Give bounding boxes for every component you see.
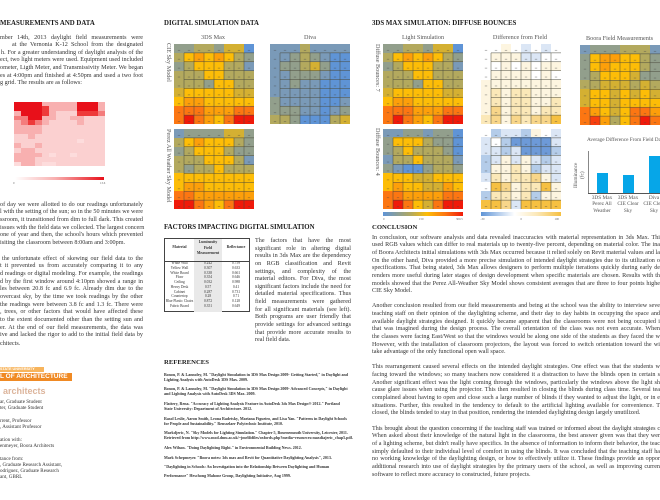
legend: light simulation colour bar bbox=[383, 212, 463, 220]
legend: difference colour bar bbox=[480, 212, 561, 220]
text block: conclusion paragraph 3: situations. Further, this resulted in the tendency to default to the artificial lighting available for convenience. T bbox=[372, 403, 660, 409]
text block: conclusion paragraph 4 bbox=[372, 426, 660, 478]
text block: conclusion paragraph 2: the classes were facing East/West so that the windows would be along one side of the students as they faced the w bbox=[372, 334, 660, 340]
label: Boora Field Measurements: Boora Field Measurements bbox=[586, 35, 653, 42]
references list: Rasol Leslie, Aaron Smith, Leona Radetsky, Mariana Figueiro, and Lisa Yan. "Patterns in Daylight Schools bbox=[164, 416, 347, 421]
references list: "Daylighting in Schools: An Investigation into the Relationship Between Daylighting and Human bbox=[164, 464, 329, 469]
bar: Diva CIE Clear bbox=[649, 156, 660, 192]
table: material reflectance: 0.351 bbox=[204, 304, 212, 308]
text block: field measurements intro: ometer, Ligth Meter, and Transmissivity Meter. We began bbox=[0, 65, 143, 71]
table: material reflectance: Field bbox=[204, 246, 212, 250]
text block: skewed field data: t it prevented us from accurately comparing it to any bbox=[0, 263, 143, 269]
text block: factors: settings, and complexity of the bbox=[255, 269, 351, 275]
x label: 3DS Max Perez bbox=[592, 194, 612, 214]
credits: ant, GBRL bbox=[0, 474, 22, 480]
table: material reflectance: 0.307 bbox=[204, 266, 212, 270]
text block: conclusion paragraph 1: On the other hand, Diva provided a more precise simulation of intended daylight strategies due to its utilization o bbox=[372, 258, 660, 264]
table: material reflectance: 0.649 bbox=[232, 304, 240, 308]
heading: digital simulation data: DIGITAL SIMULATION DATA bbox=[164, 20, 259, 26]
text block: field measurement limits: l with the setting of the sun; so in the 50 minutes we were bbox=[0, 209, 143, 215]
text block: conclusion paragraph 3: complained about having to open and close such a large number of blinds if they wanted to adjust the light, or in e bbox=[372, 395, 660, 401]
text block: skewed field data: er. At the end of our field measurements, the data was bbox=[0, 325, 143, 331]
table: material reflectance: 0.646 bbox=[232, 275, 240, 279]
text block: conclusion paragraph 4: no working knowledge of the daylighting design, or how to effectively utilize it. These findings provide an oppor bbox=[372, 456, 660, 462]
text block: skewed field data: d readings or digital modeling. For example, the readings bbox=[0, 271, 143, 277]
logo: school of architecture: L OF ARCHITECTURE bbox=[0, 373, 68, 380]
credits: rrent, Professor bbox=[0, 418, 31, 424]
text block: field measurement limits bbox=[0, 202, 144, 246]
credits: odriguez, Graduate Research bbox=[0, 468, 59, 474]
axis label: (fc) bbox=[579, 171, 585, 179]
table: material reflectance: Fabric Board bbox=[170, 304, 189, 308]
text block: conclusion paragraph 1 bbox=[372, 234, 660, 294]
x label: Diva CIE bbox=[643, 194, 660, 214]
credits: enmeyer, Boora Architects bbox=[0, 443, 54, 449]
heading: conclusion: CONCLUSION bbox=[372, 224, 417, 231]
references list: Bonou, P. & Lannoley, M. "Daylight Simulation in 3DS Max Design 2009- Getting Started," in Daylight and bbox=[164, 372, 348, 377]
logo: school of architecture bbox=[0, 367, 72, 381]
text block: field measurement limits: ssroom, it transitioned from dim to full dark. This created bbox=[0, 217, 143, 223]
label: Diva: Diva bbox=[304, 34, 316, 41]
text block: factors: results in 3ds Max are the dependency bbox=[255, 253, 351, 259]
table: material reflectance: 0.354 bbox=[204, 275, 212, 279]
heatmap: difference from field, bounces 7 bbox=[481, 44, 561, 124]
heatmap: difference from field, bounces 4 bbox=[481, 129, 561, 209]
text block: conclusion paragraph 2 bbox=[372, 302, 660, 355]
heading: field measurements: MEASUREMENTS AND DATA bbox=[0, 20, 95, 26]
references list: Flattery, Rena. "Accuracy of Lighting Analysis Feature in AutoDesk 3ds Max Design® 2012." Portland bbox=[164, 401, 340, 406]
legend: difference colour bar: 0 bbox=[520, 216, 522, 220]
table: material reflectance: Heavy Desk bbox=[171, 285, 188, 289]
label: Diffuse Bounces 7: Diffuse Bounces: 7 bbox=[374, 44, 381, 92]
text block: field measurements intro: es at 4:00pm and finished at 4:50pm and used a two foot bbox=[0, 73, 143, 79]
text block: field measurements intro bbox=[0, 34, 143, 86]
table: material reflectance: 0.71 bbox=[233, 294, 239, 298]
text block: factors: Both programs are user friendly that bbox=[255, 314, 351, 320]
legend: light simulation colour bar: 0 bbox=[383, 216, 384, 220]
label: Light Simulation: Light Simulation bbox=[402, 34, 444, 41]
x label: 3DS Max Perez: Perez All bbox=[592, 201, 612, 207]
table: material reflectance: 0.633 bbox=[232, 266, 240, 270]
bar: 3DS Max Perez bbox=[597, 173, 608, 192]
table: material reflectance: 0.872 bbox=[204, 299, 212, 303]
references list bbox=[164, 372, 353, 478]
heatmap: Diva CIE sky bbox=[270, 44, 350, 124]
text block: conclusion paragraph 1: CIE Sky Model. bbox=[372, 288, 412, 294]
credits: tance from: bbox=[0, 456, 23, 462]
text block: conclusion paragraph 2: Another conclusion resulted from our field measurements and being at the school was the ability to interview seve bbox=[372, 303, 660, 309]
heatmap: 3DS Max CIE sky bbox=[174, 44, 254, 124]
table: material reflectance: 0.57 bbox=[205, 285, 211, 289]
table: material reflectance: 0.032 bbox=[204, 280, 212, 284]
text block: conclusion paragraph 4: This brought about the question concerning if the teaching staff was trained or informed about the daylight strategies c bbox=[372, 426, 660, 432]
text block: conclusion paragraph 3: facing toward the windows; so many teachers now considered it a distraction to have the blinds open in certain s bbox=[372, 372, 660, 378]
credits: ar, Graduate Student bbox=[0, 399, 42, 405]
text block: conclusion paragraph 3: This rearrangement caused several effects on the intended daylight strategies. One effect was that the students w bbox=[372, 364, 660, 370]
text block: conclusion paragraph 2: that was imagined during the design process. The overall orientation of the class was not even accurate. When bbox=[372, 326, 660, 332]
legend: light simulation colour bar: 150 bbox=[419, 216, 424, 220]
x label: 3DS Max Perez: Weather bbox=[593, 208, 611, 214]
label: CIE Sky Model: CIE Sky Model bbox=[165, 43, 172, 82]
credits bbox=[0, 399, 62, 480]
x label: Diva CIE: Sky bbox=[650, 208, 658, 214]
legend: difference colour bar: 100 bbox=[554, 216, 559, 220]
text block: factors: material editors. For Diva, the most bbox=[255, 276, 351, 282]
text block: skewed field data: the readings were between 3.8 fc and 1.3 fc. There were bbox=[0, 302, 143, 308]
table: material reflectance: 0.731 bbox=[232, 290, 240, 294]
text block: skewed field data: les between 20.8 fc and 6.9 fc. Already dim due to the bbox=[0, 286, 143, 292]
text block: skewed field data: to the extent documented other than the setting sun and bbox=[0, 317, 143, 323]
text block: factors: field measurements were gathered bbox=[255, 299, 351, 305]
table: material reflectance: Reflectance bbox=[227, 245, 245, 249]
table: material reflectance: Yellow Wall bbox=[171, 266, 188, 270]
axis label bbox=[573, 162, 585, 188]
table: material reflectance: Measurement bbox=[197, 251, 219, 255]
text block: conclusion paragraph 3: closed, the blinds tended to stay in that position, rendering the intended daylighting design largely unutilized. bbox=[372, 410, 640, 416]
text block: conclusion paragraph 1: renders more useful during later stages of design development when specific materials are chosen. Results with th bbox=[372, 273, 660, 279]
heatmap: light simulation, bounces 7 bbox=[383, 44, 463, 124]
text block: field measurements intro: h. For a greater understanding of daylight analysis of the bbox=[1, 50, 143, 56]
text block: conclusion paragraph 2: available daylight strategies designed. It quickly became apparent that the classrooms were not being occupied i bbox=[372, 319, 660, 325]
table: material reflectance: 0.28 bbox=[205, 294, 211, 298]
text block: factors: The factors that have the most bbox=[255, 238, 351, 244]
table: material reflectance: White Wall bbox=[171, 261, 188, 265]
references list: State University: Department of Architecture. 2012. bbox=[164, 406, 252, 411]
references list: for People and Sustainability." Rensselaer Polytechnic Institute, 2010. bbox=[164, 421, 283, 426]
x label: 3DS Max CIE: CIE Clear bbox=[617, 201, 639, 207]
text block: skewed field data bbox=[0, 256, 143, 346]
heading: diffuse bounces: 3DS MAX SIMULATION: DIFFUSE BOUNCES bbox=[372, 20, 516, 26]
heading: references: REFERENCES bbox=[164, 359, 209, 366]
text block: field measurement limits: isiting the classroom between 8:00am and 3:00pm. bbox=[0, 240, 125, 246]
table: material reflectance: 0.41 bbox=[233, 285, 239, 289]
text block: conclusion paragraph 1: specifications. That being stated, 3ds Max allows designers to perform multiple iterations quickly during early de bbox=[372, 265, 660, 271]
label: 3DS Max: 3DS Max bbox=[201, 34, 225, 41]
table: material reflectance: 0.128 bbox=[232, 299, 240, 303]
text block: factors: significant factors include the need for bbox=[255, 284, 351, 290]
references list: Performance" Heschong Mahone Group, Daylighting Initiative, Aug 1999. bbox=[164, 473, 291, 478]
text block: conclusion paragraph 3 bbox=[372, 364, 660, 416]
text block: factors: that provide more accurate results to bbox=[255, 330, 351, 336]
logo: school of architecture: STATE UNIVERSITY bbox=[0, 367, 35, 371]
x label: 3DS Max Perez: 3DS Max bbox=[592, 194, 612, 200]
label: Difference from Field: Difference from Field bbox=[493, 34, 547, 41]
text block: conclusion paragraph 2: teaching staff on their opinion of the daylighting scheme, and their day to day habits in occupying the space and bbox=[372, 311, 660, 317]
label: Diffuse Bounces 4: Diffuse Bounces: 4 bbox=[374, 128, 381, 176]
text block: skewed field data: ive and lacked the rigor to add to the initial field data by bbox=[0, 332, 143, 338]
references list: and Lighting Analysis with AutoDesk 3DS Max. 2009. bbox=[164, 391, 255, 396]
legend: difference colour bar: -30 bbox=[480, 216, 484, 220]
text block: field measurements intro: at the Vernonia K-12 School from the designated bbox=[12, 42, 143, 48]
heading: factors impacting digital simulation: FACTORS IMPACTING DIGITAL SIMULATION bbox=[164, 224, 315, 231]
text block: factors bbox=[255, 238, 351, 343]
x label: Diva CIE: Diva bbox=[649, 194, 659, 200]
heatmap: field illuminance bbox=[14, 102, 105, 166]
bar: 3DS Max CIE Clear bbox=[623, 175, 634, 192]
credits: , Assistant Professor bbox=[0, 424, 41, 430]
legend: field heatmap colour bar: 13.6 bbox=[100, 181, 105, 185]
references list: Retrieved from http://www.mod.dmu.ac.uk/~jmrlibfiles/oxfords.php?media=resources:maxdiajeric_chap5.pdf. bbox=[164, 435, 353, 440]
x label: 3DS Max CIE: Sky bbox=[624, 208, 632, 214]
heatmap: 3DS Max Perez sky bbox=[174, 129, 254, 209]
text block: factors: real field data. bbox=[255, 337, 290, 343]
references list: Mark Schepmeyer. "Boora notes: 3ds max and Revit for Quantitative Daylighting Analysis", 2013. bbox=[164, 455, 332, 460]
text block: conclusion paragraph 1: of Boora Architects initial simulations with 3ds Max occurred because it relied solely on Revit material values and la bbox=[372, 250, 660, 256]
table: material reflectance: Floor bbox=[176, 275, 183, 279]
table: material reflectance: Blue Plastic Chairs bbox=[166, 299, 193, 303]
logo: architects: architects bbox=[3, 386, 46, 396]
x axis bbox=[588, 192, 660, 194]
text block: factors: for all significant materials (see left). bbox=[255, 307, 351, 313]
table: material reflectance: 0.759 bbox=[232, 261, 240, 265]
table: material reflectance bbox=[164, 238, 250, 312]
references list: Markdjeric, N. "Sky Models for Lighting Simulation." Chapter 5, Bournemouth University, Leicester, 2011. bbox=[164, 430, 348, 435]
bar chart: average difference from field data bbox=[573, 151, 660, 214]
legend: field heatmap colour bar: 0 bbox=[13, 181, 14, 185]
credits: ter, Graduate Student bbox=[0, 405, 43, 411]
text block: conclusion paragraph 2: However, with the installation of classroom projectors, the layout was forced to switch orientation toward the wi bbox=[372, 342, 660, 348]
text block: conclusion paragraph 4: software to reflect more accuracy to constructed, future projects. bbox=[372, 472, 531, 478]
table: material reflectance: 0.988 bbox=[232, 280, 240, 284]
text block: field measurements intro: g grid. The results are as follows: bbox=[0, 80, 82, 86]
axis label: Illuminance bbox=[573, 162, 579, 188]
text block: skewed field data: chitects. bbox=[0, 340, 20, 346]
text block: skewed field data: d by the first window around 4:10pm showed a range in bbox=[0, 279, 143, 285]
text block: field measurements intro: mber 14th, 2013 daylight field measurements were bbox=[0, 34, 143, 40]
credits: ation with: bbox=[0, 437, 22, 443]
references list: Bonou, P. & Lannoley, M. "Daylight Simulation in 3DS Max Design 2009- Advanced Concepts," in Daylight bbox=[164, 386, 348, 391]
table: material reflectance: Material bbox=[172, 245, 187, 249]
text block: factors: provide settings for advanced settings bbox=[255, 322, 351, 328]
text block: skewed field data: overcast sky, by the time we took readings by the other bbox=[0, 294, 143, 300]
x label: 3DS Max CIE: 3DS Max bbox=[618, 194, 638, 200]
table: material reflectance: 0.661 bbox=[232, 271, 240, 275]
text block: factors: detailed material specifications. Thus bbox=[255, 291, 351, 297]
heatmap: Boora field measurements bbox=[580, 45, 660, 125]
table: material reflectance: Countertop bbox=[171, 294, 188, 298]
table: material reflectance: Ceiling bbox=[174, 280, 185, 284]
text block: conclusion paragraph 1: used RGB values which can differ to real materials up to twenty-five percent, depending on material color. The ina bbox=[372, 242, 660, 248]
text block: conclusion paragraph 2: take advantage of the only functional open wall space. bbox=[372, 349, 506, 355]
text block: field measurement limits: one of year and then, the school's hours which prevented bbox=[0, 232, 143, 238]
text block: skewed field data: the unfortunate effect of skewing our field data to the bbox=[2, 256, 143, 262]
text block: conclusion paragraph 4: When asked about their knowledge of the natural light in the classrooms, the best answer given was that they wer bbox=[372, 433, 660, 439]
text block: conclusion paragraph 3: cause glare issues when using the projector. This then resulted in closing the blinds during class time. Several tea bbox=[372, 387, 660, 393]
text block: conclusion paragraph 4: simply defaulted to their individual level of comfort in using the blinds. It was concluded that the teaching staff ha bbox=[372, 449, 660, 455]
table: material reflectance: 0.338 bbox=[204, 271, 212, 275]
text block: conclusion paragraph 3: Another significant effect was the light coming through the windows, particularly the windows above the light sh bbox=[372, 380, 660, 386]
table: material reflectance: Luminosity bbox=[199, 240, 217, 244]
table: material reflectance: White Board bbox=[170, 271, 189, 275]
text block: conclusion paragraph 4: additional research into use of daylight strategies by the primary users of the school, as well as improving curren bbox=[372, 464, 660, 470]
text block: field measurements intro: ect, two light meters were used. Equipment used included bbox=[0, 57, 143, 63]
text block: conclusion paragraph 1: In conclusion, our software analysis and data revealed inaccuracies with material representation in 3ds Max. Thi bbox=[372, 235, 660, 241]
x label: 3DS Max CIE bbox=[617, 194, 639, 214]
table: material reflectance: 0.242 bbox=[204, 261, 212, 265]
legend: field heatmap colour bar bbox=[13, 177, 106, 185]
label: Perez All Weather Sky Model: Perez All Weather Sky Model bbox=[165, 129, 172, 203]
text block: skewed field data: , trees, or other factors that would have affected these bbox=[0, 309, 143, 315]
y axis bbox=[588, 151, 589, 193]
text block: field measurement limits: issues with the field data we collected. The largest concern bbox=[0, 225, 144, 231]
heatmap: light simulation, bounces 4 bbox=[383, 129, 463, 209]
text block: conclusion paragraph 4: of a lighting scheme, but didn't really have specifics. In the absence of information to inform their behavior, the teac bbox=[372, 441, 660, 447]
table: material reflectance: 0.287 bbox=[204, 290, 212, 294]
text block: field measurement limits: of day we were allotted to do our readings unfortunately bbox=[0, 202, 143, 208]
references list: Lighting Analysis with AutoDesk 3DS Max. 2009. bbox=[164, 377, 248, 382]
text block: factors: significant role in altering digital bbox=[255, 246, 351, 252]
legend: light simulation colour bar: 300.5 bbox=[456, 216, 463, 220]
credits: , Graduate Research Assistant, bbox=[0, 462, 62, 468]
references list: Alex Wilson. "Doing Daylighting Right." in Environmental Building News. 2012. bbox=[164, 445, 302, 450]
table: material reflectance: Cabinet bbox=[174, 290, 185, 294]
text block: factors: on RGB classification and Revit bbox=[255, 261, 351, 267]
text block: conclusion paragraph 1: models showed that the Perez All-Weather Sky Model shows consistent averages that are three to four points highe bbox=[372, 281, 660, 287]
